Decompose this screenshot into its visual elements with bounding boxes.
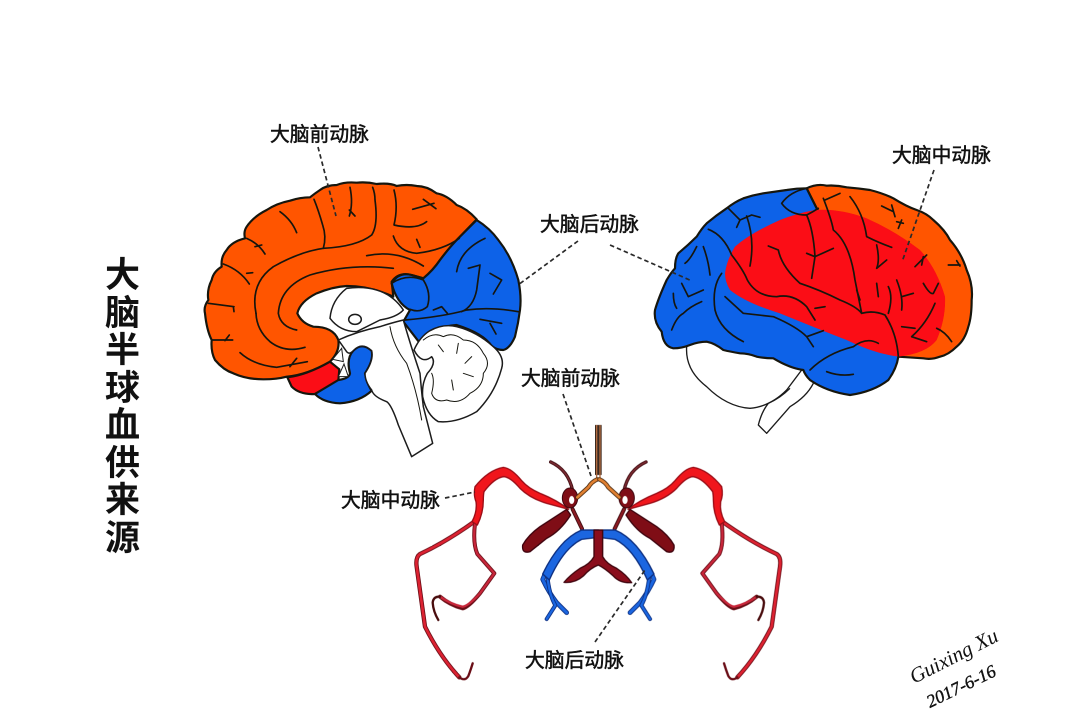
thalamus <box>330 287 403 332</box>
label: anterior cerebral artery, medial: 大脑前动脉 <box>270 124 369 146</box>
optic notches <box>333 348 348 377</box>
label: middle cerebral artery, vessels: 大脑中动脉 <box>341 490 440 512</box>
leader line: middle cerebral artery, vessels <box>445 492 475 498</box>
signature: 2017-6-16 <box>923 661 999 712</box>
third ventricle <box>349 314 361 324</box>
cerebellum <box>414 326 502 422</box>
region: posterior cerebral artery territory <box>655 188 898 395</box>
leader lines: posterior cerebral artery, centre <box>518 241 692 285</box>
label: anterior cerebral artery, vessels: 大脑前动脉 <box>521 368 620 390</box>
region: middle cerebral artery territory <box>725 210 945 357</box>
brainstem inner line <box>390 327 422 420</box>
region: anterior cerebral artery territory <box>205 182 477 379</box>
diagram: lateral view of the brain <box>655 185 972 433</box>
cerebellum outline <box>687 347 802 408</box>
artery: basilar fork <box>564 530 632 583</box>
label: middle cerebral artery, lateral: 大脑中动脉 <box>892 145 991 167</box>
diagram: medial view of the brain <box>205 182 521 457</box>
region: middle cerebral artery inferior territory <box>287 362 339 394</box>
sulci: occipital folds <box>392 238 518 334</box>
signature: Guixing Xu <box>905 623 1002 688</box>
leader line: anterior cerebral artery, vessels <box>563 394 591 476</box>
label: posterior cerebral artery, centre: 大脑后动脉 <box>540 214 639 236</box>
region: posterior cerebral artery occipital territory <box>392 220 521 350</box>
leader line: posterior cerebral artery, vessels <box>595 570 645 642</box>
cerebellum folds <box>423 335 487 401</box>
leader line: anterior cerebral artery, medial <box>318 147 336 216</box>
arteries: right half <box>598 462 780 679</box>
arteries: left half <box>416 462 598 679</box>
region: anterior cerebral artery frontal territory <box>807 185 972 359</box>
leader line: middle cerebral artery, lateral <box>902 170 934 262</box>
title: vertical heading: 大脑半球血供来源 <box>105 256 140 558</box>
sulci: lateral folds <box>672 188 960 375</box>
label: posterior cerebral artery, vessels: 大脑后动脉 <box>525 650 624 672</box>
diagram: circle of Willis arteries <box>416 425 780 679</box>
region: posterior cerebral artery temporal territory <box>315 346 372 403</box>
sulci: frontal and parietal folds <box>208 187 459 367</box>
artery: anterior cerebral trunk fill <box>597 425 600 478</box>
brainstem outline <box>758 383 813 433</box>
artery: anterior cerebral trunk <box>597 425 600 475</box>
brainstem <box>338 320 433 457</box>
